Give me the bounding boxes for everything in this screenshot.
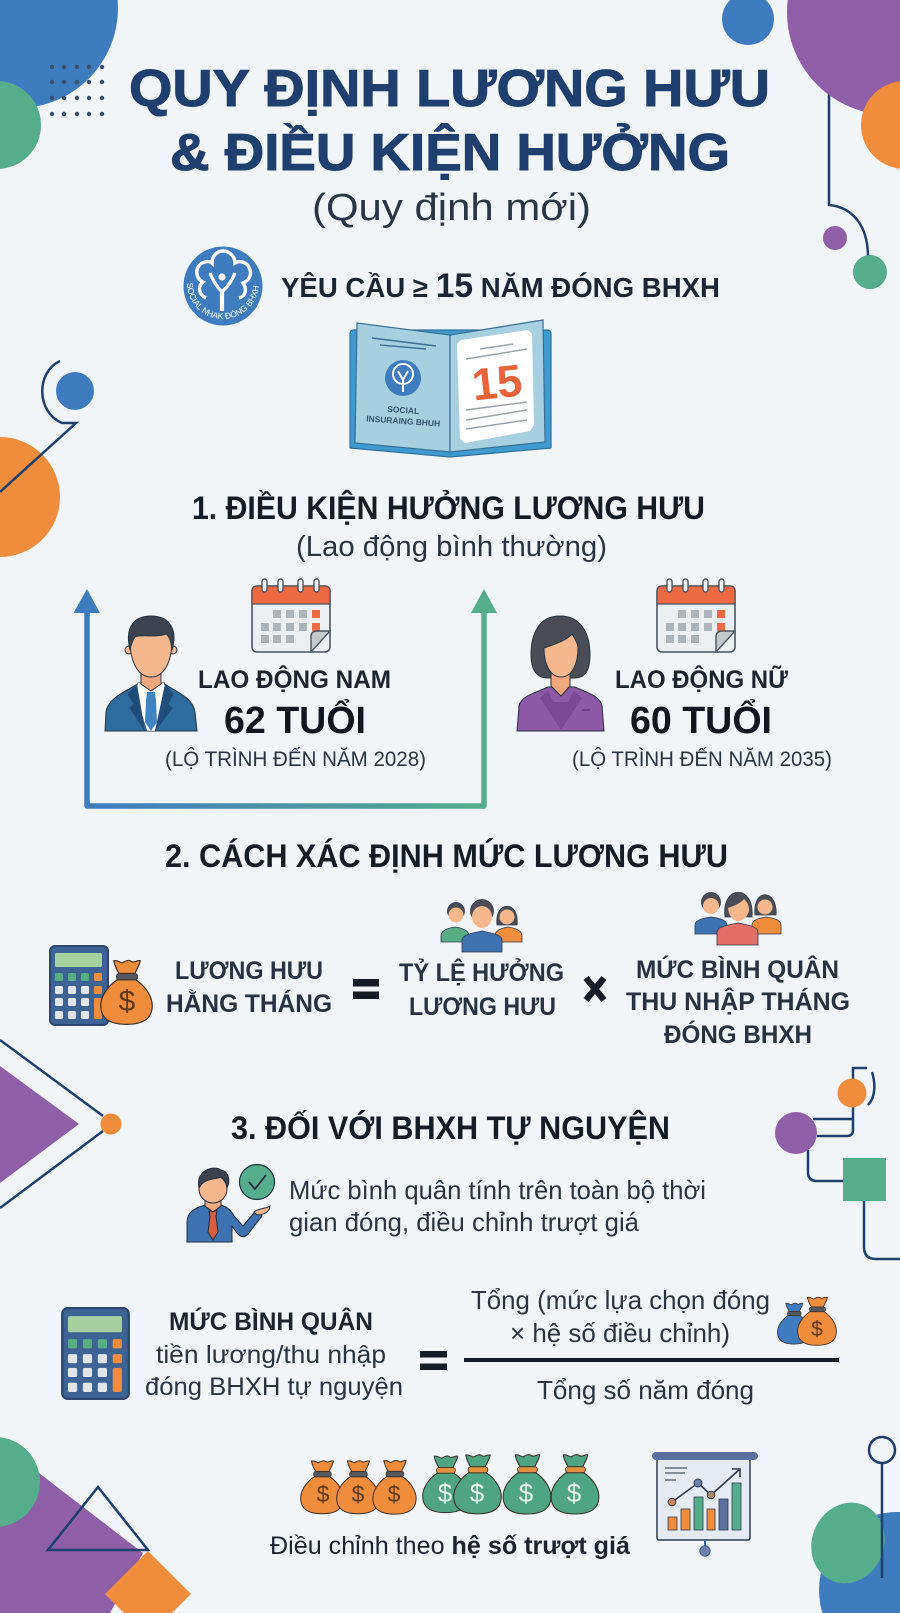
decoration: right connector shapes <box>775 1068 900 1259</box>
equals sign <box>353 979 379 999</box>
icon: presentation chart <box>652 1452 758 1556</box>
description text <box>289 1175 706 1237</box>
formula term: monthly pension <box>166 957 332 1018</box>
decoration: top-left shapes <box>0 0 118 169</box>
icon: calculator and money bag: $ <box>119 985 136 1018</box>
icon: row of money bags <box>301 1455 599 1514</box>
heading 2: 2. CÁCH XÁC ĐỊNH MỨC LƯƠNG HƯU <box>165 838 728 874</box>
formula term: rate: TỶ LỆ HƯỞNG <box>399 957 564 987</box>
icon: man in suit <box>105 616 197 731</box>
icon: people group 2 <box>695 892 781 945</box>
icon: people group 1 <box>441 900 522 952</box>
requirement text: YÊU CẦU ≥ 15 NĂM ĐÓNG BHXH <box>281 267 720 305</box>
icon: social insurance book <box>350 320 551 457</box>
male text block: (LỘ TRÌNH ĐẾN NĂM 2028) <box>165 748 426 771</box>
icon: calendar female <box>657 579 735 652</box>
title <box>129 60 770 182</box>
formula term: monthly pension: LƯƠNG HƯU <box>175 957 323 985</box>
female text block: 60 TUỔI <box>630 697 772 742</box>
female text block: (LỘ TRÌNH ĐẾN NĂM 2035) <box>572 748 832 771</box>
icon: woman in purple <box>517 616 604 731</box>
icon: row of money bags: $ <box>470 1478 485 1508</box>
icon: social insurance book: SOCIAL <box>387 404 420 416</box>
icon: social insurance logo: SOCIAL NHAK ĐÓNG BHXH <box>187 283 259 319</box>
icon: money bags pair: $ <box>811 1318 823 1341</box>
fraction: × hệ số điều chỉnh) <box>510 1318 730 1348</box>
decoration: left arrowhead shape <box>0 1040 122 1208</box>
description text: Mức bình quân tính trên toàn bộ thời <box>289 1175 706 1205</box>
formula term: average income: MỨC BÌNH QUÂN <box>636 954 839 984</box>
description text: gian đóng, điều chỉnh trượt giá <box>289 1207 640 1237</box>
subheading 1: (Lao động bình thường) <box>296 531 607 563</box>
icon: social insurance logo <box>184 246 262 326</box>
subtitle: (Quy định mới) <box>312 187 591 229</box>
formula left side <box>145 1306 403 1401</box>
fraction <box>464 1285 839 1405</box>
arrow: U-shaped gradient arrows <box>74 589 497 806</box>
male text block: LAO ĐỘNG NAM <box>198 664 391 694</box>
formula left side: đóng BHXH tự nguyện <box>145 1373 403 1401</box>
male text block: 62 TUỔI <box>224 697 366 742</box>
caption: Điều chỉnh theo hệ số trượt giá <box>270 1532 630 1560</box>
icon: row of money bags: $ <box>519 1478 534 1508</box>
fraction: Tổng số năm đóng <box>537 1375 754 1405</box>
icon: row of money bags: $ <box>388 1481 401 1507</box>
formula term: monthly pension: HẰNG THÁNG <box>166 989 332 1018</box>
heading 3: 3. ĐỐI VỚI BHXH TỰ NGUYỆN <box>231 1110 670 1146</box>
formula term: rate <box>399 957 564 1021</box>
title: QUY ĐỊNH LƯƠNG HƯU <box>129 60 770 118</box>
female text block <box>572 664 832 771</box>
decoration: bottom-right shapes <box>799 1437 900 1613</box>
decoration: top-right shapes <box>722 0 900 289</box>
male text block <box>165 664 426 771</box>
female text block: LAO ĐỘNG NỮ <box>615 664 788 694</box>
formula term: average income <box>626 954 850 1049</box>
formula term: average income: ĐÓNG BHXH <box>664 1019 812 1049</box>
icon: row of money bags: $ <box>352 1481 365 1507</box>
icon: money bags pair <box>777 1297 836 1345</box>
icon: row of money bags: $ <box>567 1478 582 1508</box>
icon: calendar male <box>252 579 330 652</box>
decoration: bottom-left shapes <box>0 1437 191 1613</box>
title: & ĐIỀU KIỆN HƯỞNG <box>170 123 730 182</box>
icon: presenter with check <box>187 1164 274 1242</box>
formula left side: MỨC BÌNH QUÂN <box>169 1306 373 1336</box>
formula term: rate: LƯƠNG HƯU <box>409 993 556 1021</box>
equals sign <box>420 1351 447 1370</box>
fraction: Tổng (mức lựa chọn đóng <box>471 1285 770 1315</box>
multiply sign <box>586 978 604 1000</box>
icon: social insurance book: INSURAING BHUH <box>366 413 440 429</box>
icon: social insurance book: 15 <box>469 355 525 410</box>
icon: row of money bags: $ <box>317 1481 330 1507</box>
icon: row of money bags: $ <box>438 1478 453 1508</box>
icon: calculator <box>62 1308 129 1399</box>
decoration: left middle circles <box>0 361 94 557</box>
formula term: average income: THU NHẬP THÁNG <box>626 986 850 1016</box>
formula left side: tiền lương/thu nhập <box>156 1341 386 1369</box>
icon: calculator and money bag <box>50 946 152 1025</box>
heading 1: 1. ĐIỀU KIỆN HƯỞNG LƯƠNG HƯU <box>192 490 705 526</box>
